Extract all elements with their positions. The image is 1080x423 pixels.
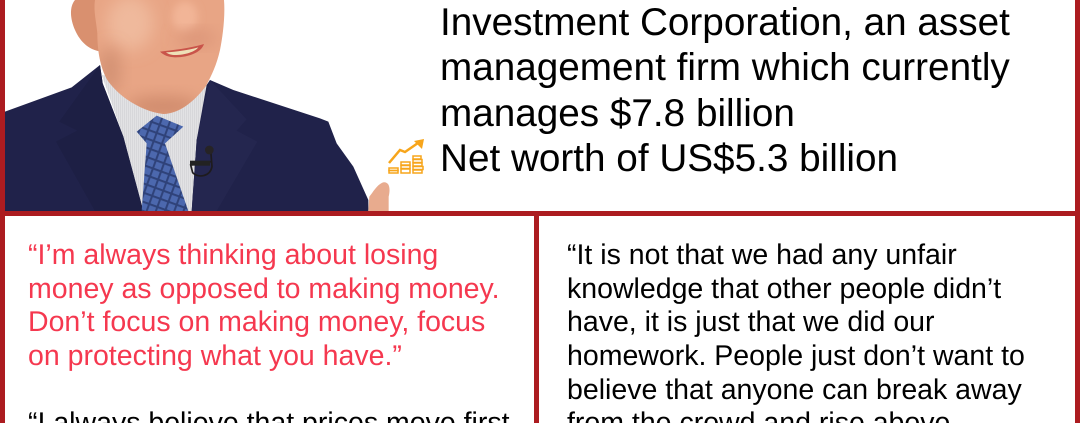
frame: vertical divider	[534, 216, 539, 423]
photo: man in navy suit	[5, 0, 390, 211]
mouth	[160, 44, 204, 57]
quote: losing money, red: money as opposed to making money.	[28, 273, 500, 305]
ear	[71, 0, 107, 52]
quote: losing money, red: on protecting what you have.”	[28, 340, 402, 372]
quote: homework, cut off: knowledge that other people didn’t	[567, 273, 1001, 305]
quote: losing money, red: “I’m always thinking about losing	[28, 239, 438, 271]
hand	[368, 182, 390, 211]
quote: homework, cut off: “It is not that we had any unfair	[567, 239, 957, 271]
heading: firm description and net worth: management firm which currently	[440, 46, 1010, 89]
shirt	[102, 75, 207, 211]
icon: rising arrow and coins	[388, 139, 424, 174]
face	[93, 0, 227, 117]
heading: firm description and net worth: manages $7.8 billion	[440, 92, 795, 135]
heading: firm description and net worth	[440, 1, 1010, 180]
heading: firm description and net worth: Investment Corporation, an asset	[440, 1, 1010, 44]
tie	[137, 116, 188, 211]
quote: losing money, red: Don’t focus on making money, focus	[28, 306, 485, 338]
microphone	[191, 150, 212, 176]
frame: left border	[0, 0, 5, 423]
frame: right border	[1075, 0, 1080, 423]
quote: homework, cut off: believe that anyone can break away	[567, 374, 1022, 406]
heading: firm description and net worth: Net worth of US$5.3 billion	[440, 137, 898, 180]
lapels	[56, 65, 143, 211]
quote: homework, cut off: homework. People just don’t want to	[567, 340, 1025, 372]
quote: homework, cut off: have, it is just that we did our	[567, 306, 935, 338]
suit	[5, 65, 368, 211]
quote: losing money, red	[28, 239, 500, 372]
quote: homework, cut off	[567, 239, 1025, 423]
frame: horizontal divider	[0, 211, 1080, 216]
